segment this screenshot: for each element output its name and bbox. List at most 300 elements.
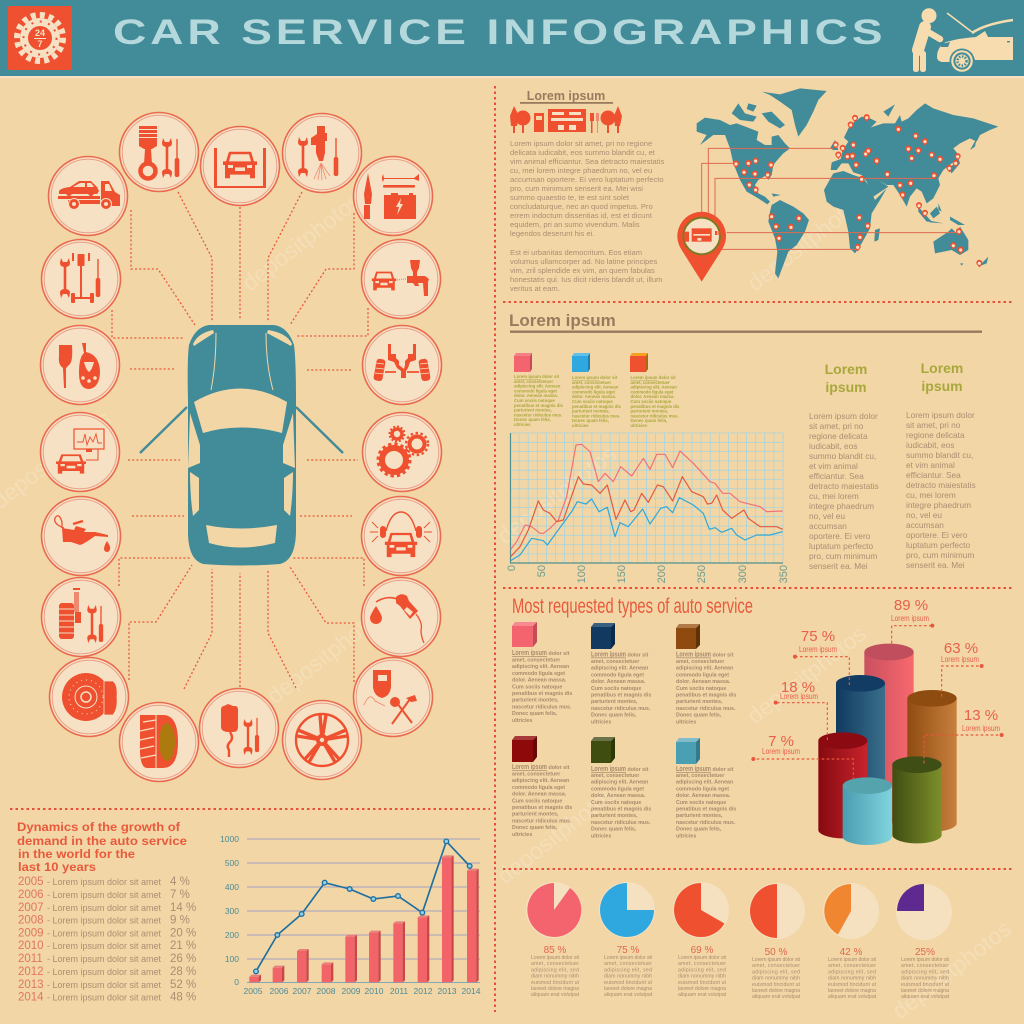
- legend cube: orange: dolor. Aenean massa.: [630, 394, 675, 399]
- legend cube: orange: penatibus et magnis dis: [630, 404, 680, 409]
- year list: - Lorem ipsum dolor sit amet: [47, 916, 162, 926]
- text column 2: no, vel eu: [906, 510, 942, 520]
- legend item: pink: [512, 622, 572, 724]
- legend cube: pink: amet, consectetuer: [514, 379, 553, 384]
- pie 50 percent: [749, 883, 805, 1000]
- pie 75 percent: 75 %: [617, 945, 640, 956]
- pie 75 percent: aliquam erat volutpat: [604, 992, 653, 998]
- legend cube: pink: Cum sociis natoque: [514, 398, 555, 403]
- heading: in the world for the: [18, 849, 135, 861]
- legend cube: pink: Donec quam felis,: [514, 417, 551, 422]
- icon: car horn noise: [362, 496, 440, 576]
- legend item: olive: Cum sociis natoque: [591, 800, 641, 806]
- year list: - Lorem ipsum dolor sit amet: [47, 954, 162, 964]
- watermark pattern: depositphotos: [742, 620, 871, 729]
- callouts: Lorem ipsum: [962, 724, 1000, 733]
- year list: 48 %: [170, 992, 196, 1004]
- legend item: teal: [676, 738, 736, 839]
- legend cube: blue: adipiscing elit. Aenean: [572, 385, 619, 390]
- pie 85 percent: 85 %: [544, 945, 567, 956]
- legend item: dark red: Donec quam felis,: [512, 825, 558, 831]
- year list: 26 %: [170, 953, 196, 965]
- year list: 2014: [18, 992, 44, 1004]
- callouts: Lorem ipsum: [891, 614, 929, 623]
- legend cube: orange: parturient montes,: [630, 409, 668, 414]
- legend item: navy: dolor. Aenean massa.: [591, 679, 646, 685]
- legend item: brown: dolor sit: [711, 652, 734, 658]
- text column 1: [809, 361, 879, 571]
- pie 75 percent: [599, 882, 655, 998]
- callouts: 7 %: [768, 733, 794, 750]
- year list: - Lorem ipsum dolor sit amet: [47, 992, 162, 1002]
- panel: growth dynamics: [17, 822, 481, 1004]
- heading: Most requested types of auto service: [512, 595, 753, 618]
- legend item: pink: parturient montes,: [512, 698, 559, 704]
- text column 2: integre phaedrum: [906, 500, 971, 510]
- connector lines: [702, 148, 958, 249]
- pie 75 percent: amet, consectetuer: [604, 961, 652, 967]
- watermark pattern: depositphotos: [237, 187, 366, 296]
- pie 42 percent: [823, 883, 879, 1000]
- pie 85 percent: euismod tincidunt ut: [531, 980, 580, 986]
- icon: mechanic and car: [913, 8, 1013, 74]
- legend item: navy: nascetur ridiculus mus.: [591, 706, 651, 712]
- legend item: olive: dolor sit: [626, 767, 649, 773]
- year list: 2009: [18, 928, 44, 940]
- pie 50 percent: amet, consectetuer: [752, 963, 800, 969]
- text column 1: cu, mei lorem: [809, 491, 859, 501]
- pie 85 percent: [526, 882, 582, 998]
- year list: - Lorem ipsum dolor sit amet: [47, 967, 162, 977]
- icon: tow truck: [48, 156, 128, 236]
- heading: Lorem ipsum: [509, 311, 616, 330]
- legend cube: orange: Lorem ipsum: [630, 375, 658, 380]
- pie 69 percent: adipiscing elit, sed: [678, 967, 726, 973]
- legend cube: blue: dolor. Aenean massa.: [572, 394, 616, 399]
- icon: oil can: [42, 496, 120, 576]
- legend item: pink: ultricies: [512, 718, 532, 724]
- combo chart: 2009: [342, 986, 361, 996]
- legend item: pink: adipiscing elit. Aenean: [512, 664, 569, 670]
- combo chart: 2006: [270, 986, 289, 996]
- year list: 7 %: [170, 889, 190, 901]
- text column 1: Lorem ipsum dolor: [809, 411, 878, 421]
- pie 85 percent: adipiscing elit, sed: [531, 967, 579, 973]
- text column 1: oportere. Ei vero: [809, 531, 871, 541]
- legend item: pink: penatibus et magnis dis: [512, 691, 572, 697]
- icon: car keys and remote: [40, 326, 120, 404]
- legend item: navy: commodo ligula eget: [591, 672, 644, 678]
- combo chart: 200: [225, 930, 239, 940]
- line chart: 50: [536, 565, 548, 577]
- legend item: brown: Donec quam felis,: [676, 713, 722, 719]
- legend item: olive: adipiscing elit. Aenean: [591, 780, 648, 786]
- year list: 2008: [18, 914, 44, 926]
- year list: 14 %: [170, 902, 196, 914]
- line chart: 350: [778, 565, 790, 583]
- legend item: navy: ultricies: [591, 719, 611, 725]
- pie 25 percent: [896, 884, 952, 1000]
- legend cube: blue: commodo ligula eget: [572, 389, 616, 394]
- legend cube: orange: commodo ligula eget: [630, 389, 674, 394]
- map pins: [733, 114, 982, 267]
- pie 69 percent: [673, 882, 729, 998]
- watermark pattern: depositphotos: [492, 780, 621, 889]
- legend item: pink: dolor. Aenean massa.: [512, 678, 567, 684]
- legend item: brown: commodo ligula eget: [676, 672, 729, 678]
- heading: Dynamics of the growth of: [17, 822, 180, 834]
- combo chart: 1000: [220, 834, 239, 844]
- icon: battery and clamp: [354, 156, 432, 236]
- legend cube: blue: Lorem ipsum: [572, 375, 599, 380]
- text column 2: regione delicata: [906, 430, 965, 440]
- icon: tyre: [120, 702, 198, 782]
- callouts: 75 %: [801, 628, 835, 645]
- callouts: Lorem ipsum: [799, 645, 837, 654]
- legend cube: blue: parturient montes,: [572, 409, 610, 414]
- pie 50 percent: euismod tincidunt ut: [752, 982, 801, 988]
- text block: Lorem ipsum dolor sit amet, pri no regione: [510, 139, 652, 148]
- text block: honestatis qui. Ius dicit rideris blandit ut, illum: [510, 275, 662, 284]
- pie 69 percent: diam nonummy nibh: [678, 974, 726, 980]
- legend cube: blue: amet, consectetuer: [572, 380, 611, 385]
- panel: car service diagram: [40, 112, 442, 782]
- legend item: brown: parturient montes,: [676, 699, 723, 705]
- text column 2: Lorem ipsum dolor: [906, 410, 975, 420]
- line chart: 150: [616, 565, 628, 583]
- legend cube: pink: ultricies: [514, 422, 531, 427]
- legend item: olive: commodo ligula eget: [591, 786, 644, 792]
- pie 25 percent: euismod tincidunt ut: [901, 982, 950, 988]
- callouts: 63 %: [944, 640, 978, 657]
- legend item: navy: Cum sociis natoque: [591, 686, 641, 692]
- icon: suspension axle: [362, 326, 442, 404]
- text block: vim, zril splendide ex vim, an quem fabulas: [510, 266, 655, 275]
- legend item: brown: nascetur ridiculus mus.: [676, 706, 736, 712]
- heading: [17, 822, 187, 874]
- legend cube: pink: dolor. Aenean massa.: [514, 393, 558, 398]
- year list: 21 %: [170, 940, 196, 952]
- pie 42 percent: diam nonummy nibh: [828, 976, 876, 982]
- legend item: pink: amet, consectetuer: [512, 658, 560, 664]
- icon: shock absorber and tyre: [42, 578, 120, 656]
- legend item: olive: ultricies: [591, 833, 611, 839]
- legend item: pink: Lorem ipsum: [512, 650, 547, 657]
- pie 50 percent: laoreet dolore magna: [752, 988, 800, 994]
- legend item: brown: Lorem ipsum: [676, 652, 711, 658]
- heading: Lorem ipsum: [527, 89, 605, 103]
- pie 25 percent: adipiscing elit, sed: [901, 969, 949, 975]
- year list: 2011: [18, 953, 43, 965]
- legend cube: pink: commodo ligula eget: [514, 388, 558, 393]
- legend item: brown: [676, 624, 736, 725]
- pie 50 percent: 50 %: [765, 947, 788, 958]
- icon: brake disc: [50, 658, 128, 736]
- line chart: 0: [506, 565, 518, 571]
- text column 2: pro, cum minimum: [906, 550, 974, 560]
- text column 2: oportere. Ei vero: [906, 530, 968, 540]
- text column 1: Lorem: [825, 361, 867, 377]
- icon: steering parts and tools: [42, 240, 120, 318]
- legend item: dark red: penatibus et magnis dis: [512, 805, 572, 811]
- legend item: brown: Cum sociis natoque: [676, 686, 726, 692]
- pie 75 percent: diam nonummy nibh: [604, 974, 652, 980]
- legend item: navy: dolor sit: [626, 652, 649, 658]
- text block: Est ei urbanitas democritum. Eos etiam: [510, 248, 642, 257]
- legend cube: orange: [630, 353, 680, 428]
- combo chart: 2005: [244, 986, 263, 996]
- text column 1: no, vel eu: [809, 511, 845, 521]
- watermark pattern: depositphotos: [887, 915, 1016, 1024]
- legend cube: pink: dolor sit: [541, 374, 560, 379]
- year list: - Lorem ipsum dolor sit amet: [47, 890, 162, 900]
- legend item: teal: dolor. Aenean massa.: [676, 793, 731, 799]
- pie 42 percent: laoreet dolore magna: [828, 988, 876, 994]
- text column 1: detracto maiestatis: [809, 481, 879, 491]
- line chart: 200: [656, 565, 668, 583]
- legend item: teal: Lorem ipsum: [676, 766, 711, 773]
- legend item: dark red: dolor sit: [547, 765, 570, 771]
- legend item: navy: penatibus et magnis dis: [591, 692, 651, 698]
- car top view: [140, 325, 343, 566]
- pie 85 percent: Lorem ipsum dolor sit: [531, 955, 580, 961]
- icon: welding mask and hammers: [354, 658, 432, 736]
- callouts: [762, 597, 1000, 756]
- pie 25 percent: laoreet dolore magna: [901, 988, 949, 994]
- legend item: brown: ultricies: [676, 719, 696, 725]
- pie 50 percent: adipiscing elit, sed: [752, 969, 800, 975]
- text column 2: iudicabit, eos: [906, 440, 954, 450]
- pie 69 percent: 69 %: [691, 945, 714, 956]
- Americas and Greenland: [697, 88, 827, 278]
- text column 2: [906, 360, 976, 570]
- legend item: pink: nascetur ridiculus mus.: [512, 704, 572, 710]
- legend cube: orange: amet, consectetuer: [630, 380, 670, 385]
- text block: vim animal efficiantur. Sea detracto maiestatis: [510, 157, 665, 166]
- pie 85 percent: laoreet dolore magna: [531, 986, 579, 992]
- year list: 2012: [18, 966, 44, 978]
- panel: line chart section: [506, 311, 982, 583]
- text column 1: et vim animal: [809, 461, 858, 471]
- year list: 2005: [18, 876, 44, 888]
- year list: 2013: [18, 979, 44, 991]
- legend cube: blue: penatibus et magnis dis: [572, 404, 622, 409]
- year list: - Lorem ipsum dolor sit amet: [47, 903, 162, 913]
- pie 25 percent: Lorem ipsum dolor sit: [901, 957, 950, 963]
- legend cube: orange: nascetur ridiculus mus.: [630, 413, 679, 418]
- text block: concludaturque, nec an quod impetus. Pro: [510, 202, 653, 211]
- text column 2: efficiantur. Sea: [906, 470, 961, 480]
- text block: legendos deserunt his ei.: [510, 229, 594, 238]
- legend item: pink: Donec quam felis,: [512, 711, 558, 717]
- text block: delicata iudicabit, eos summo blandit cu, et: [510, 148, 656, 157]
- icon: 24/7 gear logo: [8, 6, 72, 70]
- legend item: dark red: Lorem ipsum: [512, 764, 547, 771]
- text block: volumus ullamcorper ad. No latine principes: [510, 257, 658, 266]
- text column 2: cu, mei lorem: [906, 490, 956, 500]
- legend item: dark red: commodo ligula eget: [512, 785, 565, 791]
- title: CAR SERVICE INFOGRAPHICS: [113, 12, 883, 52]
- combo chart: [220, 834, 481, 996]
- legend item: navy: amet, consectetuer: [591, 659, 639, 665]
- text block: veritus at eam.: [510, 284, 560, 293]
- legend cube: orange: Donec quam felis,: [630, 418, 667, 423]
- icon: alloy wheel: [282, 700, 362, 780]
- connectors: [112, 192, 368, 689]
- legend item: teal: adipiscing elit. Aenean: [676, 780, 733, 786]
- legend cube: pink: [514, 353, 564, 427]
- combo chart: 0: [234, 977, 239, 987]
- panel: most requested types: [512, 595, 1004, 845]
- pie 25 percent: amet, consectetuer: [901, 963, 949, 969]
- year list: 4 %: [170, 876, 190, 888]
- callouts: Lorem ipsum: [762, 747, 800, 756]
- icon: exhaust and tools: [200, 688, 278, 768]
- combo chart: 2007: [293, 986, 312, 996]
- text column 1: summo blandit cu,: [809, 451, 876, 461]
- icon: service station row: [510, 106, 622, 133]
- legend item: dark red: adipiscing elit. Aenean: [512, 778, 569, 784]
- pie 69 percent: euismod tincidunt ut: [678, 980, 727, 986]
- legend item: olive: parturient montes,: [591, 813, 638, 819]
- legend cube: orange: ultricies: [630, 423, 648, 428]
- legend cube: orange: Cum sociis natoque: [630, 399, 672, 404]
- legend item: dark red: nascetur ridiculus mus.: [512, 818, 572, 824]
- text column 2: luptatum perfecto: [906, 540, 970, 550]
- legend cube: orange: adipiscing elit. Aenean: [630, 385, 677, 390]
- year list: - Lorem ipsum dolor sit amet: [47, 877, 162, 887]
- panel: pie charts: [526, 882, 952, 1000]
- pie 85 percent: diam nonummy nibh: [531, 974, 579, 980]
- line chart: [506, 433, 790, 583]
- legend item: olive: Lorem ipsum: [591, 766, 626, 773]
- combo chart: 2014: [462, 986, 481, 996]
- pie 25 percent: 25%: [915, 947, 935, 958]
- legend item: teal: ultricies: [676, 833, 696, 839]
- legend item: pink: commodo ligula eget: [512, 671, 565, 677]
- pie 25 percent: diam nonummy nibh: [901, 976, 949, 982]
- watermark pattern: depositphotos: [262, 600, 391, 709]
- text block: summo quaestio te, te est sint solet: [510, 193, 630, 202]
- legend item: olive: penatibus et magnis dis: [591, 806, 651, 812]
- callouts: Lorem ipsum: [941, 655, 979, 664]
- legend item: navy: Lorem ipsum: [591, 652, 626, 658]
- text column 1: sit amet, pri no: [809, 421, 864, 431]
- callouts: 18 %: [781, 679, 815, 696]
- legend item: dark red: [512, 736, 572, 838]
- legend cube: blue: ultricies: [572, 423, 589, 428]
- watermark pattern: depositphotos: [492, 440, 621, 549]
- callouts: Lorem ipsum: [780, 692, 818, 701]
- icon: diagnostics monitor: [40, 412, 120, 492]
- legend item: brown: dolor. Aenean massa.: [676, 679, 731, 685]
- legend item: navy: adipiscing elit. Aenean: [591, 666, 648, 672]
- callout leaders: [753, 626, 1002, 780]
- legend item: olive: dolor. Aenean massa.: [591, 793, 646, 799]
- legend cube: pink: penatibus et magnis dis: [514, 403, 564, 408]
- legend item: navy: Donec quam felis,: [591, 713, 637, 719]
- legend cube: blue: Donec quam felis,: [572, 418, 609, 423]
- heading: last 10 years: [18, 862, 96, 874]
- text column 1: pro, cum minimum: [809, 551, 877, 561]
- pie 42 percent: Lorem ipsum dolor sit: [828, 957, 877, 963]
- text block: cu, mei lorem integre phaedrum no, vel eu: [510, 166, 652, 175]
- callouts: 89 %: [894, 597, 928, 614]
- icon: fuel injector and tools: [282, 114, 362, 192]
- year list: 9 %: [170, 914, 190, 926]
- text column 1: efficiantur. Sea: [809, 471, 864, 481]
- legend item: dark red: dolor. Aenean massa.: [512, 792, 567, 798]
- text column 1: ipsum: [825, 379, 867, 395]
- icon: gears: [362, 412, 442, 492]
- legend cube: pink: Lorem ipsum: [514, 374, 541, 379]
- legend item: pink: dolor sit: [547, 651, 570, 657]
- legend item: dark red: Cum sociis natoque: [512, 798, 562, 804]
- icon: 24/7 gear logo: 7: [37, 39, 43, 49]
- Europe, Africa, Asia, Oceania: [824, 103, 998, 267]
- legend item: brown: amet, consectetuer: [676, 659, 724, 665]
- pie 85 percent: aliquam erat volutpat: [531, 992, 580, 998]
- panel: intro text and map: [510, 88, 998, 293]
- text column 1: iudicabit, eos: [809, 441, 857, 451]
- legend item: olive: Donec quam felis,: [591, 827, 637, 833]
- pie 69 percent: amet, consectetuer: [678, 961, 726, 967]
- year list: 20 %: [170, 928, 196, 940]
- pie 75 percent: adipiscing elit, sed: [604, 967, 652, 973]
- text column 2: Lorem: [921, 360, 963, 376]
- legend cube: orange: dolor sit: [657, 375, 676, 380]
- text block: errem indoctum dissentias id, est et dicunt: [510, 211, 653, 220]
- legend cube: blue: nascetur ridiculus mus.: [572, 413, 620, 418]
- icon: car on lift: [200, 126, 280, 206]
- pie 50 percent: diam nonummy nibh: [752, 976, 800, 982]
- legend item: dark red: parturient montes,: [512, 812, 559, 818]
- legend item: brown: penatibus et magnis dis: [676, 692, 736, 698]
- text block: [510, 139, 665, 293]
- icon: fuel nozzle and drop: [362, 578, 440, 656]
- pie 42 percent: euismod tincidunt ut: [828, 982, 877, 988]
- year list: - Lorem ipsum dolor sit amet: [47, 941, 162, 951]
- callouts: 13 %: [964, 707, 998, 724]
- text column 2: ipsum: [921, 378, 963, 394]
- legend item: teal: parturient montes,: [676, 813, 723, 819]
- legend item: teal: Cum sociis natoque: [676, 800, 726, 806]
- cylinder chart: [751, 624, 1004, 845]
- text column 1: senserit ea. Mei: [809, 561, 868, 571]
- text column 1: luptatum perfecto: [809, 541, 873, 551]
- header band: [0, 0, 1024, 78]
- icon: 24/7 gear logo: 24: [35, 28, 45, 38]
- legend item: teal: commodo ligula eget: [676, 786, 729, 792]
- line chart: 250: [696, 565, 708, 583]
- pie 42 percent: aliquam erat volutpat: [828, 994, 877, 1000]
- heading: demand in the auto service: [17, 836, 187, 848]
- combo chart: 2012: [414, 986, 433, 996]
- legend item: teal: dolor sit: [711, 767, 734, 773]
- icon: piston and tools: [120, 112, 198, 192]
- year list: [18, 876, 196, 1004]
- icon: car and spray gun: [362, 240, 440, 318]
- pie 69 percent: laoreet dolore magna: [678, 986, 726, 992]
- text block: equidem, pri an sumo vivendum. Malis: [510, 220, 640, 229]
- pie 50 percent: aliquam erat volutpat: [752, 994, 801, 1000]
- combo chart: 400: [225, 882, 239, 892]
- line chart: 100: [576, 565, 588, 583]
- legend item: dark red: amet, consectetuer: [512, 772, 560, 778]
- watermark pattern: depositphotos: [742, 187, 871, 296]
- year list: 52 %: [170, 979, 196, 991]
- world map: [677, 88, 998, 282]
